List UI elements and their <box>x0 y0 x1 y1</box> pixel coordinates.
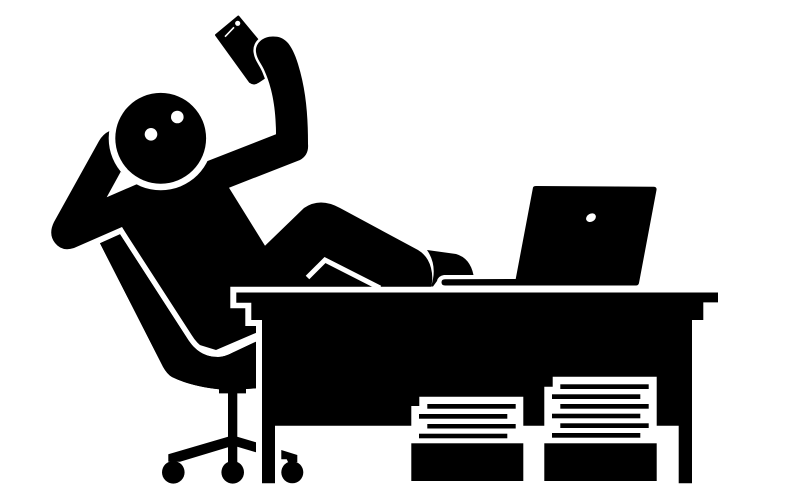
torso, arms and thigh <box>51 36 432 350</box>
foot <box>427 250 474 286</box>
stack of papers: left tray <box>411 397 523 481</box>
laptop camera dot <box>584 212 598 224</box>
chair stem and base <box>168 393 256 465</box>
desk white outline <box>230 287 440 483</box>
office chair <box>100 234 303 484</box>
tray box <box>411 443 523 481</box>
knee highlight line <box>308 260 380 288</box>
desk body <box>236 292 718 483</box>
icon: head <box>107 86 213 197</box>
tray box <box>544 443 657 481</box>
chair seat and back <box>100 234 256 393</box>
icon: phone <box>216 16 276 84</box>
icon: laptop <box>442 186 657 286</box>
desk <box>230 287 718 483</box>
chair wheels <box>162 461 185 484</box>
stack of papers: right tray <box>544 377 657 481</box>
eyes <box>145 111 184 141</box>
hand outline separating phone from arm <box>256 36 290 90</box>
paper sheets <box>411 397 523 443</box>
person: body, legs and foot <box>51 36 473 350</box>
paper sheets <box>544 377 657 443</box>
